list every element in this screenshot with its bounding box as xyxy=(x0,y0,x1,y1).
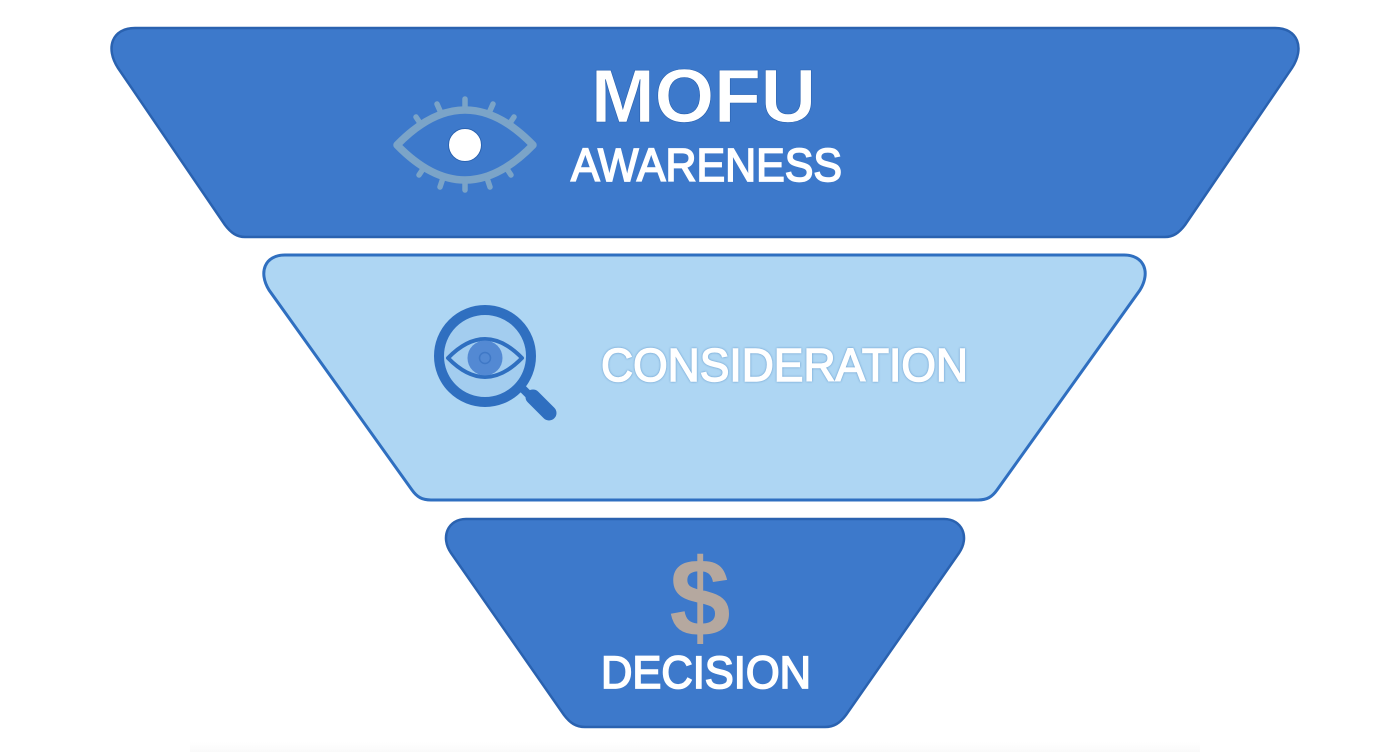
icon: eye with lashes xyxy=(397,99,533,190)
label: awareness: AWARENESS xyxy=(571,139,842,191)
awareness trapezoid xyxy=(112,28,1298,237)
label: consideration: CONSIDERATION xyxy=(601,339,968,391)
label: decision: DECISION xyxy=(601,647,811,698)
panel: awareness xyxy=(112,28,1298,237)
icon: dollar sign: $ xyxy=(669,537,731,660)
consideration trapezoid xyxy=(264,255,1145,500)
heading: MOFU: MOFU xyxy=(591,54,816,138)
panel: consideration xyxy=(264,255,1145,500)
icon: magnifying glass with eye xyxy=(439,310,549,413)
decision trapezoid xyxy=(446,519,964,727)
panel: decision xyxy=(446,519,964,727)
